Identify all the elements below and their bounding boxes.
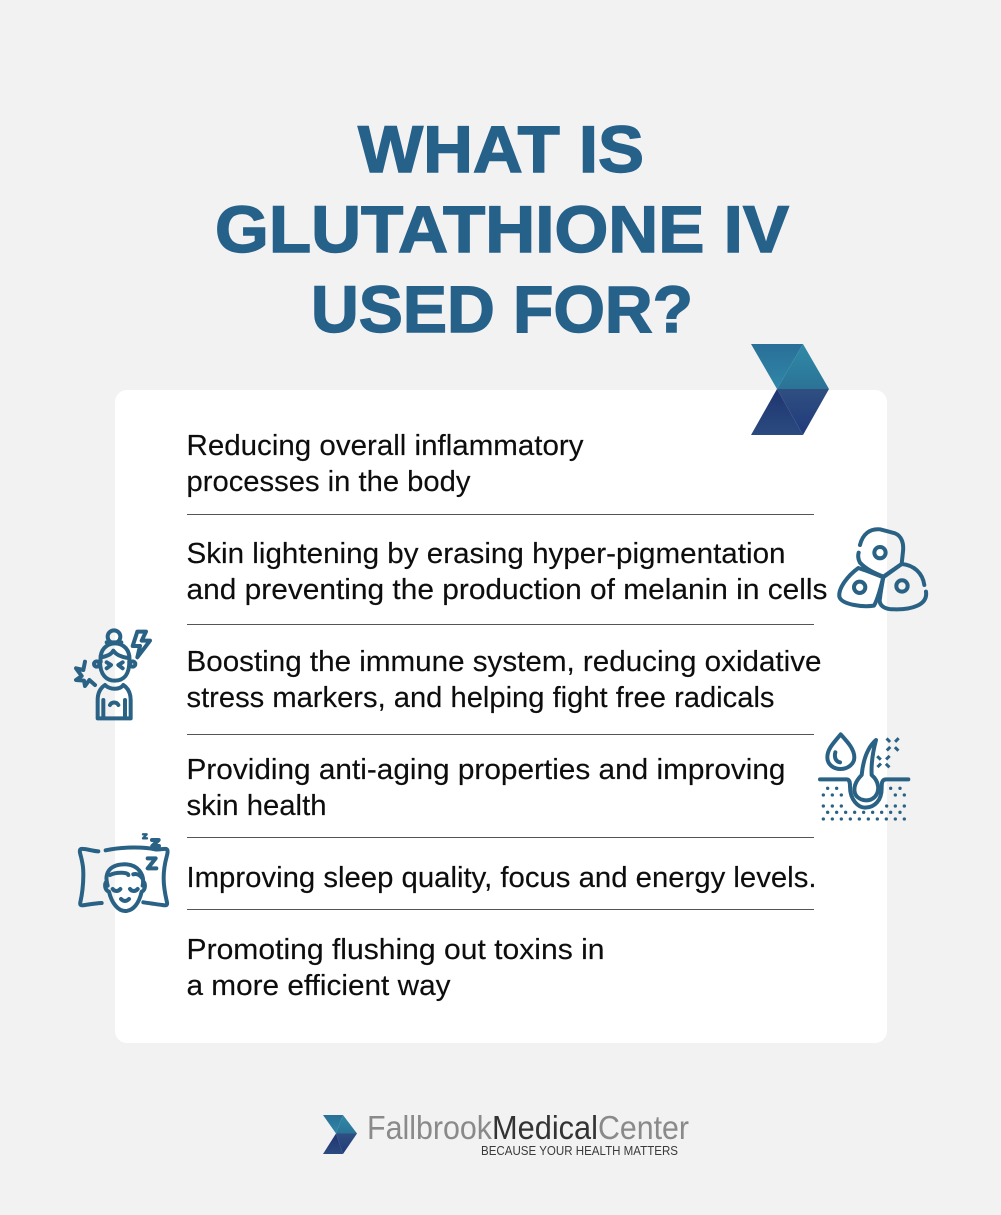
title: GLUTATHIONE IV <box>215 192 789 266</box>
title: USED FOR? <box>311 272 693 346</box>
logo: Fallbrook Medical Center: BECAUSE YOUR HEALTH MATTERS <box>481 1143 678 1158</box>
logo: Fallbrook Medical Center: Center <box>598 1109 689 1146</box>
text: anti-aging <box>186 754 786 822</box>
text: immune system: stress markers, and helping fight free radicals <box>186 682 774 714</box>
icon: stressed woman <box>76 630 150 718</box>
text: reducing inflammation <box>186 430 584 498</box>
text: anti-aging: Providing anti-aging properties and improving <box>186 754 786 786</box>
text: skin lightening <box>186 538 828 606</box>
icon: logo chevron <box>323 1115 357 1154</box>
icon: sleeping head on pillow <box>80 834 168 911</box>
logo: Fallbrook Medical Center: Fallbrook <box>367 1109 492 1146</box>
text: immune system <box>186 646 822 714</box>
icon: skin cells <box>839 529 926 609</box>
text: anti-aging: skin health <box>186 790 326 822</box>
icon: hair follicle and skin <box>820 734 908 821</box>
logo: Fallbrook Medical Center <box>323 1109 689 1158</box>
title: WHAT IS <box>358 112 644 186</box>
title <box>215 112 789 346</box>
text: skin lightening: and preventing the production of melanin in cells <box>186 574 828 606</box>
text: flushing toxins: a more efficient way <box>186 970 451 1002</box>
text: flushing toxins <box>186 934 604 1002</box>
icon: chevron logo mark <box>751 344 829 435</box>
logo: Fallbrook Medical Center: Medical <box>492 1109 598 1146</box>
text: sleep quality: Improving sleep quality, focus and energy levels. <box>186 862 816 894</box>
panel: uses list card <box>115 390 887 1043</box>
text: immune system: Boosting the immune system, reducing oxidative <box>186 646 822 678</box>
text: reducing inflammation: processes in the body <box>186 466 471 498</box>
text: flushing toxins: Promoting flushing out toxins in <box>186 934 604 966</box>
text: skin lightening: Skin lightening by erasing hyper-pigmentation <box>186 538 786 570</box>
text: reducing inflammation: Reducing overall inflammatory <box>186 430 584 462</box>
